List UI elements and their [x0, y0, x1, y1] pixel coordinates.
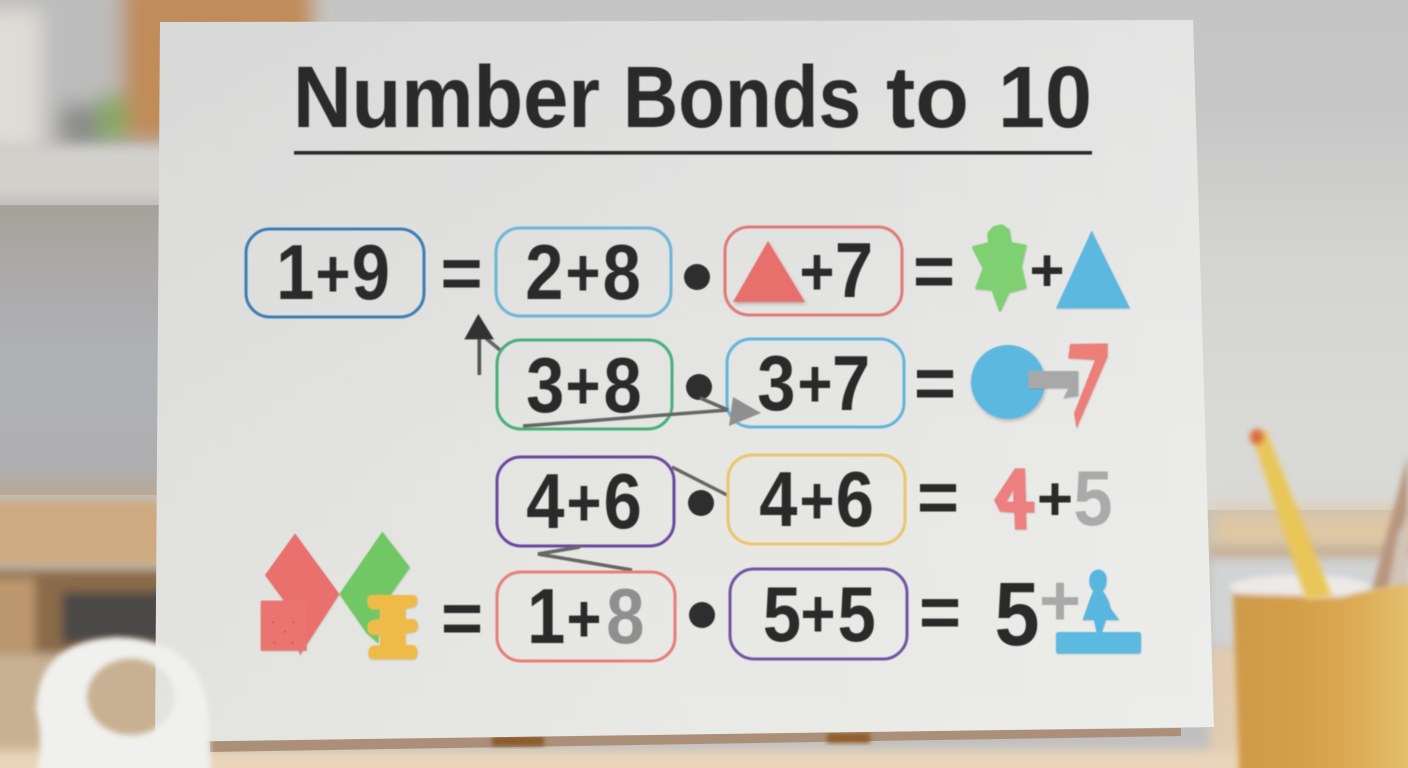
title: Number — [293, 49, 600, 146]
dot — [689, 602, 715, 628]
box: 5+5 — [730, 569, 907, 659]
plus: + — [1029, 237, 1065, 304]
paper poster — [155, 20, 1214, 742]
icon: blue triangle — [1056, 231, 1130, 308]
arrow right — [523, 397, 761, 426]
box: 4+6 right: + — [800, 462, 834, 539]
title: Bonds — [623, 49, 861, 146]
box: 2+8: 8 — [603, 228, 641, 316]
box: 4+6 left: + — [567, 464, 601, 541]
box: 2+8 — [496, 228, 671, 316]
box: 1+8: + — [567, 580, 601, 657]
box: 4+6 left: 6 — [604, 457, 642, 545]
box: 4+6 right: 4 — [759, 455, 797, 543]
title: to — [886, 49, 969, 146]
equals sign: = — [440, 234, 483, 314]
box: 4+6 right: 6 — [836, 455, 874, 543]
dot — [686, 374, 712, 400]
arrow up — [464, 314, 500, 375]
box: 3+8: + — [566, 347, 600, 424]
connector — [672, 467, 727, 495]
gray 5: 5 — [1073, 455, 1113, 542]
connector between rows 3 and 4 — [538, 547, 632, 570]
box: 3+8 — [497, 340, 672, 429]
foreground: yellow cup — [1230, 575, 1408, 768]
row 2 — [497, 339, 1108, 429]
box: triangle +7 — [725, 226, 902, 315]
box: 4+6 left — [497, 457, 674, 546]
equals sign: = — [919, 573, 961, 653]
box: triangle +7: + — [800, 233, 834, 310]
icon: green star shape — [973, 226, 1025, 310]
box: triangle +7: 7 — [835, 226, 873, 314]
box: 1+8: 8 — [606, 572, 644, 660]
row 3 — [497, 455, 1113, 546]
box: 4+6 right — [728, 455, 905, 544]
poster content — [246, 49, 1141, 665]
box: 5+5: 5 — [763, 570, 801, 658]
box: 1+8: 1 — [527, 572, 565, 660]
box: 3+7 — [727, 339, 904, 427]
red 4 — [994, 468, 1034, 529]
equals sign: = — [913, 232, 955, 312]
box: 1+9 — [246, 228, 424, 317]
equals sign: = — [914, 344, 956, 424]
box: 3+7: + — [798, 345, 832, 422]
box: 3+8: 8 — [604, 341, 642, 429]
plus: + — [1037, 465, 1073, 534]
icon: gray connector — [1028, 371, 1078, 398]
icon: blue circle — [971, 345, 1045, 419]
row 1 — [246, 226, 1130, 317]
dot — [688, 490, 714, 516]
box: 2+8: + — [566, 234, 600, 311]
shadow under poster — [210, 728, 1181, 752]
box: 5+5: 5 — [838, 570, 876, 658]
title: 10 — [998, 49, 1092, 146]
large 5: 5 — [994, 564, 1040, 665]
box: 3+8: 3 — [526, 341, 564, 429]
box: 4+6 left: 4 — [526, 457, 564, 545]
gray plus: + — [1039, 561, 1081, 641]
foreground: tape roll — [32, 637, 212, 768]
box: 3+7: 7 — [832, 339, 870, 427]
box: 1+9: 1 — [276, 228, 314, 316]
equals sign: = — [917, 458, 959, 538]
icon: red seven — [1068, 343, 1108, 428]
box: 1+9: + — [316, 235, 350, 312]
foreground: brown pencil — [1372, 455, 1408, 590]
title — [293, 49, 1092, 155]
foreground: pencil — [1250, 429, 1332, 600]
dot — [684, 264, 710, 290]
box: 5+5: + — [801, 575, 835, 652]
box: 1+8 — [497, 572, 675, 661]
icon: shape cluster — [261, 532, 418, 659]
box: 3+7: 3 — [757, 339, 795, 427]
box: 1+9: 9 — [352, 228, 390, 316]
row 4 — [261, 532, 1141, 665]
box: 2+8: 2 — [525, 228, 563, 316]
equals sign: = — [441, 579, 483, 659]
icon: blue figure on base — [1056, 569, 1141, 654]
